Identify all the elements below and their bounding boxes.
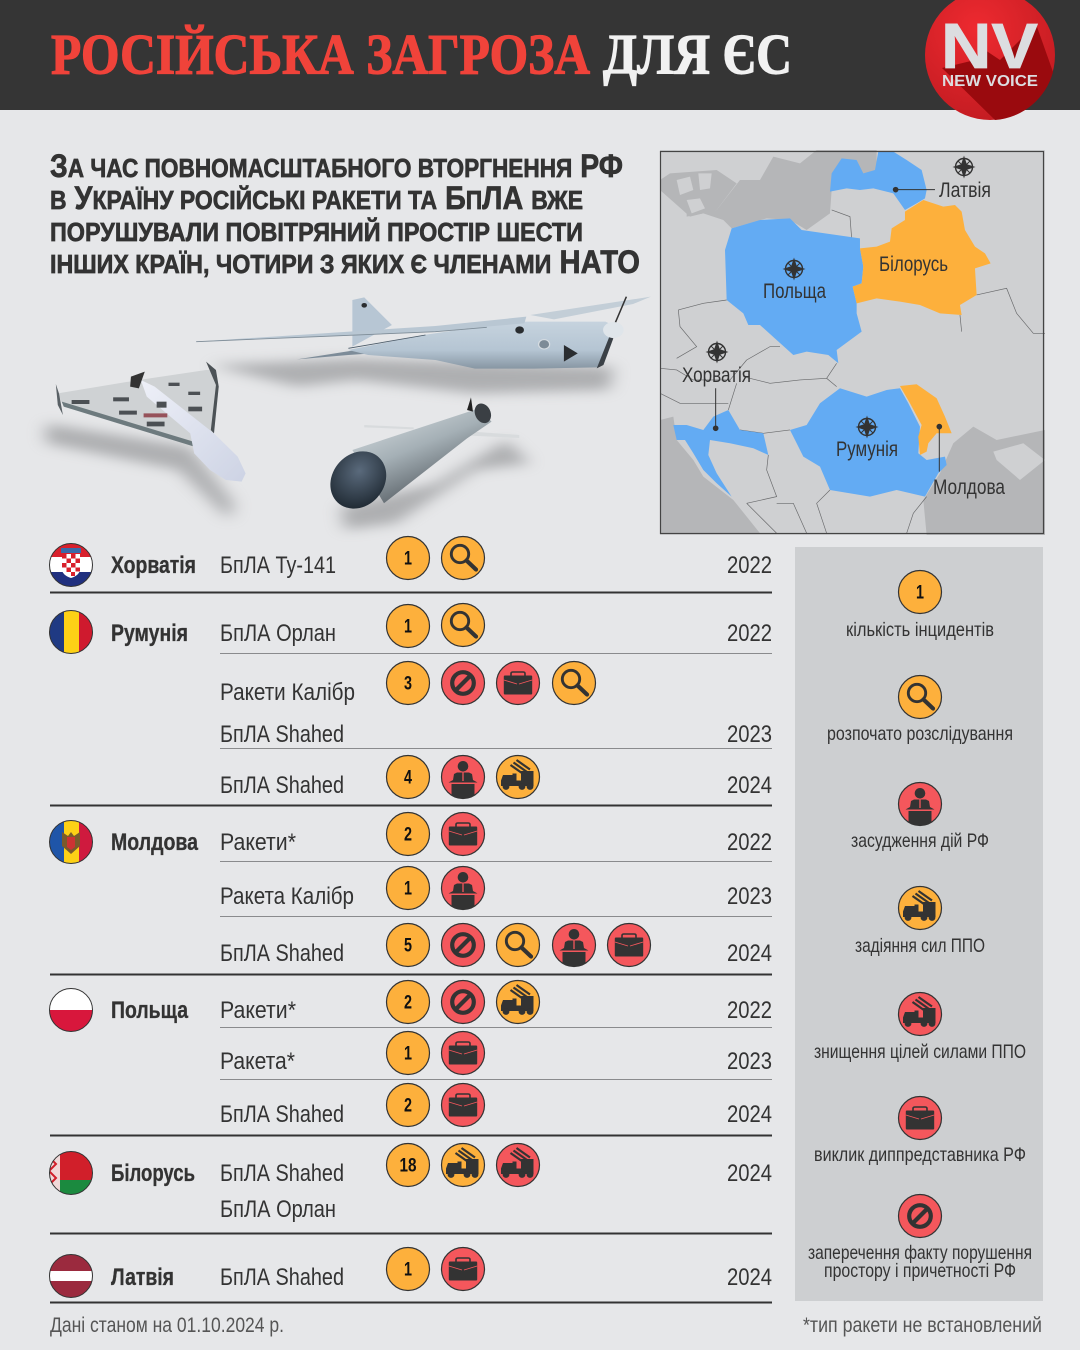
map [660,150,1045,535]
country block: Poland [49,980,772,1128]
header band [0,0,1080,110]
row [220,980,772,1024]
row: БпЛА Орлан [220,620,336,647]
missile: Kalibr [321,397,519,515]
row: 2023 [727,1048,772,1075]
row [220,662,596,706]
row: 2023 [727,883,772,910]
islands [677,173,1045,480]
row: Ракети Калібр [220,679,355,706]
country: Belarus [853,200,991,315]
row: 2023 [727,721,772,748]
country block: Belarus [49,1144,772,1223]
NATO markers [706,156,976,438]
row: 2022 [727,620,772,647]
row: БпЛА Ту-141 [220,552,336,579]
row [220,866,772,910]
row: 4 [404,768,412,788]
row: 2024 [727,940,772,967]
map frame [660,152,1044,534]
country block: Moldova [49,812,772,967]
row [220,1144,772,1187]
country: Latvia [830,152,927,210]
row [220,924,772,967]
row: 2024 [727,1264,772,1291]
legend item: count: кількість інцидентів [846,619,994,641]
row [220,721,772,748]
row: 18 [400,1156,416,1176]
row: БпЛА Shahed [220,721,344,748]
country block: Latvia: Латвія [111,1264,174,1291]
country block: Belarus: Білорусь [111,1160,195,1187]
row [220,1248,772,1291]
map labels: Румунія [836,438,898,461]
row: 3 [404,674,412,694]
map labels: Молдова [933,476,1005,499]
country block: Croatia: Хорватія [111,552,196,579]
logo: NV New Voice: NV [941,10,1038,82]
intro heading: ПОРУШУВАЛИ ПОВІТРЯНИЙ ПРОСТІР ШЕСТИ [50,217,583,247]
country: Poland [725,218,863,363]
legend item: count [846,570,994,641]
country block: Latvia [49,1248,772,1298]
footnote: date: Дані станом на 01.10.2024 р. [50,1314,284,1337]
legend item: air defence deployed [855,886,985,957]
footnote: missile type: *тип ракети не встановлений [803,1314,1042,1337]
drones and missile illustration [46,297,651,530]
row: Ракета Калібр [220,883,354,910]
intro heading [50,148,640,280]
row: 1 [404,878,412,900]
country: Romania [790,388,947,497]
intro heading: В УКРАЇНУ РОСІЙСЬКІ РАКЕТИ ТА БПЛА ВЖЕ [50,180,583,216]
row: БпЛА Орлан [220,1196,336,1223]
logo: NV New Voice: NEW VOICE [942,73,1038,90]
intro heading: ЗА ЧАС ПОВНОМАСШТАБНОГО ВТОРГНЕННЯ РФ [50,148,623,184]
country block: Croatia [49,536,772,587]
legend item: investigation: розпочато розслідування [827,723,1013,745]
country: Moldova [900,384,952,455]
row: 1 [404,1044,412,1064]
row [220,536,772,580]
row [220,812,772,856]
row: 1 [404,616,412,638]
country block: Romania: Румунія [111,620,188,647]
legend item: count: 1 [916,582,924,604]
intro heading: ІНШИХ КРАЇН, ЧОТИРИ З ЯКИХ Є ЧЛЕНАМИ НАТО [50,244,640,280]
row: БпЛА Shahed [220,1264,344,1291]
row: БпЛА Shahed [220,940,344,967]
row: БпЛА Shahed [220,1160,344,1187]
row: БпЛА Shahed [220,772,344,799]
shadows [46,358,613,530]
country block: Poland: Польща [111,997,189,1024]
row: 2 [404,824,412,846]
legend item: investigation [827,676,1013,745]
borders [660,210,1045,533]
legend item: denial: простору і причетності РФ [824,1260,1016,1282]
row: 5 [404,936,412,956]
legend item: condemnation: засудження дій РФ [851,830,989,852]
legend item: diplomat summoned [814,1096,1026,1166]
map labels: Польща [763,280,826,303]
flag: Croatia [49,543,93,587]
row [220,604,772,648]
legend item: denial [808,1194,1032,1282]
legend item: diplomat summoned: виклик диппредставника РФ [814,1144,1026,1166]
drone: Orlan [196,297,651,369]
logo: NV New Voice [925,0,1055,120]
row: Ракети* [220,829,296,856]
drone: Shahed [56,362,246,482]
flag: Poland [49,988,93,1032]
row: 2024 [727,1101,772,1128]
row [220,1084,772,1128]
row: Ракета* [220,1048,295,1075]
row: 2024 [727,1160,772,1187]
country block: Moldova: Молдова [111,829,199,856]
row: 2022 [727,997,772,1024]
map labels [682,179,1005,499]
title: ДЛЯ ЄС [603,24,792,86]
map labels: Хорватія [682,364,751,387]
country block: Romania [49,604,772,799]
row: 1 [404,1260,412,1280]
map labels: Білорусь [879,253,948,276]
sea areas [660,150,1045,535]
title: РОСІЙСЬКА ЗАГРОЗА [51,24,590,86]
row: 2022 [727,829,772,856]
flag: Belarus [49,1151,93,1195]
panel: legend [795,547,1043,1301]
flag: Latvia [49,1254,93,1298]
row [220,1032,772,1075]
map labels: Латвія [939,179,991,202]
row: 2022 [727,552,772,579]
row: 2 [404,1096,412,1116]
row: 2 [404,992,412,1014]
leader lines [713,187,942,472]
flag: Moldova [49,820,93,864]
row: БпЛА Shahed [220,1101,344,1128]
legend item: targets destroyed: знищення цілей силами ППО [814,1041,1026,1063]
legend item: air defence deployed: задіяння сил ППО [855,935,985,957]
row: 1 [404,548,412,570]
row: 2024 [727,772,772,799]
table dividers [50,592,772,1304]
legend item: condemnation [851,782,989,852]
row: Ракети* [220,997,296,1024]
row [220,756,772,799]
legend item: targets destroyed [814,992,1026,1063]
country: Croatia [673,410,768,497]
flag: Romania [49,610,93,654]
